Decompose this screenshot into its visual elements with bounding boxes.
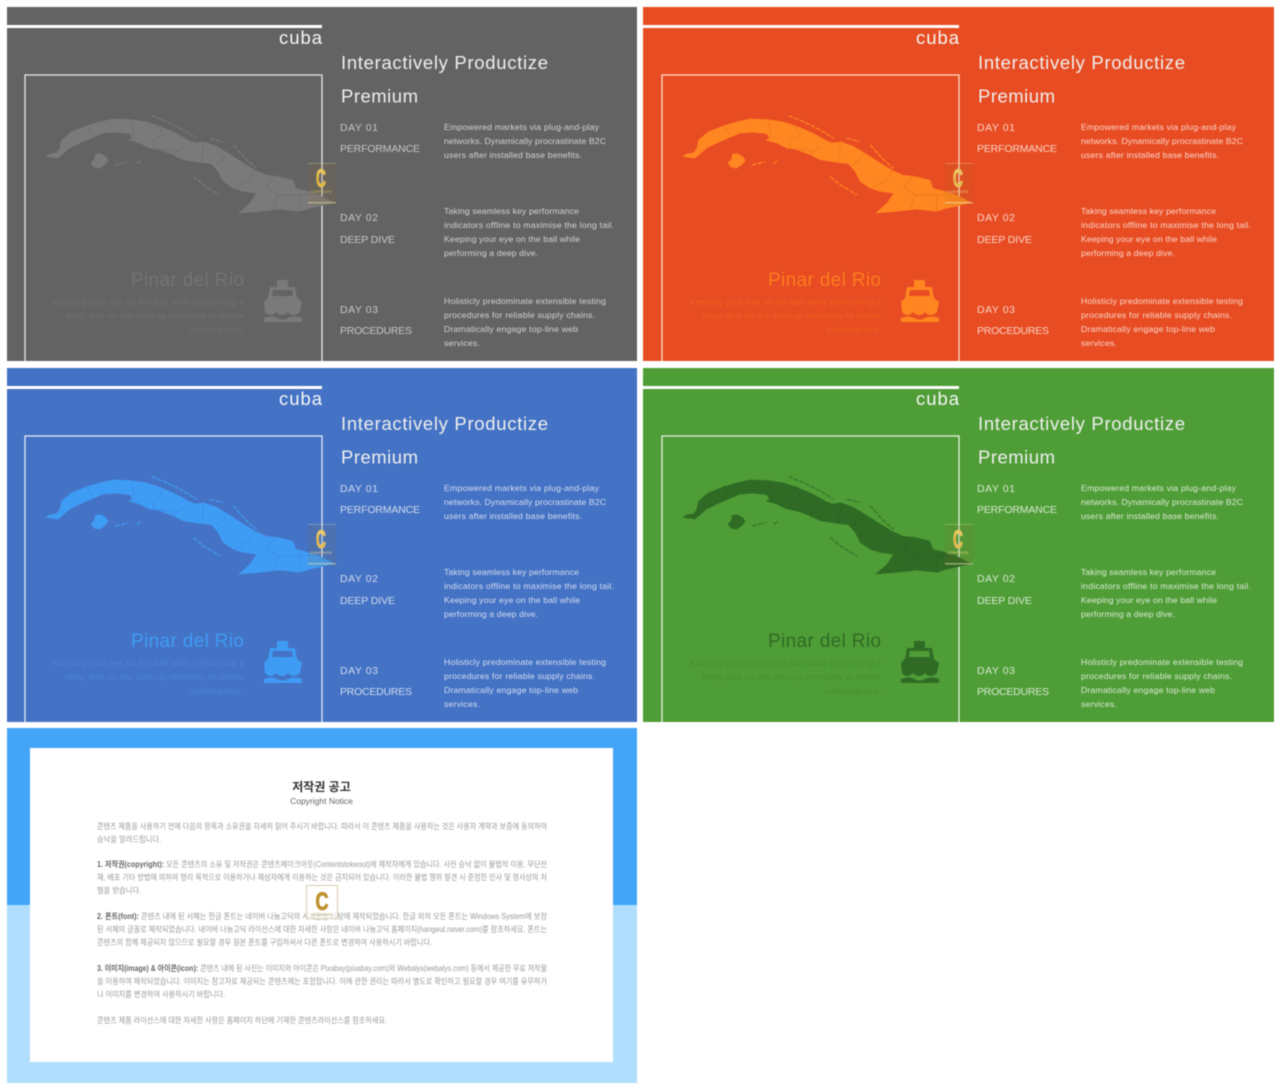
day 02 text: Taking seamless key performance bbox=[1081, 567, 1216, 577]
day 02: DAY 02 bbox=[340, 573, 378, 585]
day 03 text: services. bbox=[1081, 699, 1117, 709]
day 01 text: users after installed base benefits. bbox=[1081, 511, 1219, 521]
panel: copyright notice bbox=[7, 728, 637, 1083]
day 02 text bbox=[444, 206, 614, 258]
map frame bbox=[25, 75, 322, 361]
logo bbox=[308, 524, 336, 566]
panel: green slide bbox=[643, 368, 1274, 722]
label: cuba: cuba bbox=[279, 388, 323, 409]
map frame bbox=[662, 75, 959, 361]
day 03: PROCEDURES bbox=[340, 325, 412, 337]
day 03 text: Dramatically engage top-line web bbox=[1081, 685, 1215, 695]
logo: CONTENTS bbox=[312, 913, 333, 917]
day 02 text: performing a deep dive. bbox=[444, 248, 538, 258]
day 03: DAY 03 bbox=[977, 665, 1015, 677]
region name: Pinar del Rio bbox=[131, 631, 244, 652]
region description bbox=[53, 658, 244, 696]
logo bbox=[308, 163, 336, 205]
map of Cuba bbox=[45, 477, 335, 574]
region description: deep dive on the start-up mentality to derive bbox=[702, 672, 881, 682]
map frame bbox=[662, 436, 959, 722]
day 01 text: users after installed base benefits. bbox=[444, 511, 582, 521]
day 02 bbox=[977, 573, 1032, 607]
region description: deep dive on the start-up mentality to derive bbox=[65, 311, 244, 321]
day 01 text bbox=[444, 122, 606, 160]
panel: blue slide bbox=[7, 368, 637, 722]
day 03 text: Holisticly predominate extensible testing bbox=[444, 657, 606, 667]
section 2: font: 된 서체의 글꼴로 제작되었습니다. 네이버 나눔고딕 라이선스에 대한 자세한 사항은 네이버 나눔고딕 홈페이지(hangeul.naver.com)를 참조하세요. 폰트는 bbox=[97, 924, 547, 934]
day 02 text bbox=[1081, 206, 1251, 258]
day 02 text: Keeping your eye on the ball while bbox=[1081, 595, 1217, 605]
logo: C bbox=[953, 166, 963, 193]
day 03 text: Holisticly predominate extensible testing bbox=[444, 296, 606, 306]
logo bbox=[945, 524, 973, 566]
logo bbox=[945, 163, 973, 205]
day 03 text: procedures for reliable supply chains. bbox=[1081, 310, 1232, 320]
map of Cuba bbox=[45, 116, 335, 213]
day 01: DAY 01 bbox=[977, 122, 1015, 134]
day 01 text: networks. Dynamically procrastinate B2C bbox=[1081, 136, 1243, 146]
region description: convergence. bbox=[826, 325, 881, 335]
day 02: DAY 02 bbox=[977, 212, 1015, 224]
heading: Interactively Productize bbox=[341, 413, 548, 434]
day 03 text: services. bbox=[444, 338, 480, 348]
day 02 text: indicators offline to maximise the long tail. bbox=[444, 220, 614, 230]
section 3: image and icon: 을 이용하여 제작되었습니다. 이미지는 참고자료 제공되는 콘텐츠에는 포함합니다. 이에 관한 권리는 따라서 별도로 확인하고 필요할 경우 여기를 유무하거 bbox=[97, 976, 547, 986]
day 02 text: Taking seamless key performance bbox=[444, 567, 579, 577]
day 03 text: Dramatically engage top-line web bbox=[444, 685, 578, 695]
day 01 text bbox=[1081, 122, 1243, 160]
day 01 text: Empowered markets via plug-and-play bbox=[1081, 122, 1237, 132]
day 01: PERFORMANCE bbox=[977, 504, 1057, 516]
logo: CONTENTS bbox=[311, 190, 332, 194]
day 03 text: Dramatically engage top-line web bbox=[1081, 324, 1215, 334]
day 01 text: Empowered markets via plug-and-play bbox=[444, 483, 600, 493]
day 03 text: services. bbox=[444, 699, 480, 709]
day 02: DEEP DIVE bbox=[977, 595, 1032, 607]
top bar bbox=[7, 386, 322, 389]
section 1: copyright: 1. 저작권(copyright): 모든 콘텐츠의 소유 및 저작권은 콘텐츠메이크아웃(Contentstokeout)에 제작자에게 있습니다. 사전 승낙 없이 불법적 이용, 무단전 bbox=[97, 859, 547, 869]
day 01 text bbox=[1081, 483, 1243, 521]
day 03 text bbox=[1081, 296, 1243, 348]
notice subtitle: Copyright Notice bbox=[290, 796, 353, 806]
section 1: copyright bbox=[97, 859, 547, 895]
day 03 text: Dramatically engage top-line web bbox=[444, 324, 578, 334]
icon: ship bbox=[264, 280, 302, 322]
icon: ship bbox=[901, 641, 939, 683]
icon: ship bbox=[901, 280, 939, 322]
day 03 text: Holisticly predominate extensible testing bbox=[1081, 296, 1243, 306]
day 02 text: performing a deep dive. bbox=[444, 609, 538, 619]
day 03 text bbox=[444, 657, 606, 709]
day 02 text: indicators offline to maximise the long tail. bbox=[1081, 220, 1251, 230]
region description: deep dive on the start-up mentality to derive bbox=[702, 311, 881, 321]
top bar bbox=[7, 25, 322, 28]
region description: convergence. bbox=[189, 686, 244, 696]
logo: CONTENTS bbox=[948, 551, 969, 555]
region description: deep dive on the start-up mentality to derive bbox=[65, 672, 244, 682]
section 1: copyright: 재, 배포 기타 방법에 의하여 영리 목적으로 이용하거나 제삼자에게 이용하는 것은 금지되어 있습니다. 이러한 불법 행위 발견 시 준엄한 민사 및 형사상의 처 bbox=[97, 872, 547, 882]
map of Cuba bbox=[682, 116, 972, 213]
day 02 text: indicators offline to maximise the long tail. bbox=[1081, 581, 1251, 591]
day 01: PERFORMANCE bbox=[340, 143, 420, 155]
day 03 text: procedures for reliable supply chains. bbox=[444, 671, 595, 681]
region description: Keeping your eye on the ball while performing a bbox=[690, 297, 881, 307]
label: cuba: cuba bbox=[279, 27, 323, 48]
region description: Keeping your eye on the ball while performing a bbox=[53, 297, 244, 307]
day 03 bbox=[340, 665, 412, 698]
day 01 text: networks. Dynamically procrastinate B2C bbox=[1081, 497, 1243, 507]
day 02 text: Taking seamless key performance bbox=[444, 206, 579, 216]
region description: convergence. bbox=[189, 325, 244, 335]
day 03 text: services. bbox=[1081, 338, 1117, 348]
day 01 bbox=[977, 483, 1057, 516]
logo bbox=[306, 886, 338, 918]
day 03: PROCEDURES bbox=[977, 686, 1049, 698]
day 01: DAY 01 bbox=[977, 483, 1015, 495]
heading line 2: Premium bbox=[341, 86, 418, 106]
section 1: copyright: 벌을 받습니다. bbox=[97, 885, 141, 895]
day 01: PERFORMANCE bbox=[340, 504, 420, 516]
top bar bbox=[643, 25, 959, 28]
day 02 text: Keeping your eye on the ball while bbox=[444, 234, 580, 244]
region description bbox=[53, 297, 244, 335]
day 01 text: networks. Dynamically procrastinate B2C bbox=[444, 497, 606, 507]
region description: Keeping your eye on the ball while performing a bbox=[53, 658, 244, 668]
region name: Pinar del Rio bbox=[768, 631, 881, 652]
day 01: DAY 01 bbox=[340, 483, 378, 495]
logo: C bbox=[316, 166, 326, 193]
section 3: image and icon: 나 이미지를 변경하여 사용하시기 바랍니다. bbox=[97, 989, 225, 999]
day 03 text: procedures for reliable supply chains. bbox=[1081, 671, 1232, 681]
day 03 text: procedures for reliable supply chains. bbox=[444, 310, 595, 320]
heading: Interactively Productize bbox=[341, 52, 548, 73]
day 01 text bbox=[444, 483, 606, 521]
day 03 bbox=[977, 304, 1049, 337]
day 03 text bbox=[444, 296, 606, 348]
day 02 text: indicators offline to maximise the long tail. bbox=[444, 581, 614, 591]
heading: Interactively Productize bbox=[978, 52, 1185, 73]
section 2: font: 콘텐츠의 함께 제공되지 않으므로 필요할 경우 원본 폰트를 구입하셔서 다른 폰트로 변경하여 사용하시기 바랍니다. bbox=[97, 937, 432, 947]
map of Cuba bbox=[682, 477, 972, 574]
heading line 2: Premium bbox=[978, 446, 1055, 468]
day 02 text bbox=[1081, 567, 1251, 619]
intro paragraph: 승낙을 알려드립니다. bbox=[97, 834, 161, 844]
section 2: font bbox=[97, 911, 547, 947]
day 01 text: users after installed base benefits. bbox=[444, 150, 582, 160]
top bar bbox=[643, 386, 959, 389]
logo: C bbox=[316, 887, 329, 916]
region description bbox=[690, 658, 881, 696]
day 02: DEEP DIVE bbox=[977, 234, 1032, 246]
region name: Pinar del Rio bbox=[131, 270, 244, 291]
notice title: 저작권 공고 bbox=[292, 779, 351, 794]
heading line 2: Premium bbox=[341, 446, 418, 468]
day 02 text bbox=[444, 567, 614, 619]
day 01: PERFORMANCE bbox=[977, 143, 1057, 155]
day 02 text: performing a deep dive. bbox=[1081, 609, 1175, 619]
day 02 bbox=[340, 212, 395, 246]
logo: CONTENTS bbox=[311, 551, 332, 555]
day 02 text: performing a deep dive. bbox=[1081, 248, 1175, 258]
day 02 text: Taking seamless key performance bbox=[1081, 206, 1216, 216]
day 02 bbox=[977, 212, 1032, 246]
day 03: DAY 03 bbox=[340, 665, 378, 677]
day 01 bbox=[340, 122, 420, 155]
day 01 text: networks. Dynamically procrastinate B2C bbox=[444, 136, 606, 146]
day 01 bbox=[340, 483, 420, 516]
logo: CONTENTS bbox=[948, 190, 969, 194]
section 3: image and icon bbox=[97, 963, 547, 999]
logo: C bbox=[316, 527, 326, 554]
panel: orange slide bbox=[643, 7, 1274, 361]
region description bbox=[690, 297, 881, 335]
day 02: DAY 02 bbox=[977, 573, 1015, 585]
day 03 text bbox=[1081, 657, 1243, 709]
intro paragraph bbox=[97, 821, 547, 844]
day 03: DAY 03 bbox=[977, 304, 1015, 316]
intro paragraph: 콘텐츠 제품을 사용하기 전에 다음의 항목과 소유권을 자세히 읽어 주시기 바랍니다. 따라서 이 콘텐츠 제품을 사용하는 것은 사용자 계약과 보증에 동의하여 bbox=[97, 821, 547, 831]
heading: Interactively Productize bbox=[978, 413, 1185, 434]
day 03 bbox=[977, 665, 1049, 698]
day 01 bbox=[977, 122, 1057, 155]
section 2: font: 2. 폰트(font): 콘텐츠 내에 된 서체는 한글 폰트는 네이버 나눔고딕의 서체들을 바탕에 제작되었습니다. 한글 외의 모든 폰트는 Windows System에 보장 bbox=[97, 911, 547, 921]
section 3: image and icon: 3. 이미지(image) & 아이콘(icon): 콘텐츠 내에 된 사진는 이미지와 아이콘은 Pixabay(pixabay.com)와 Webalys(webalys.com) 등에서 제공한 무료 저작물 bbox=[97, 963, 547, 973]
label: cuba: cuba bbox=[916, 388, 960, 409]
day 02: DEEP DIVE bbox=[340, 234, 395, 246]
region description: Keeping your eye on the ball while performing a bbox=[690, 658, 881, 668]
panel: gray slide bbox=[7, 7, 637, 361]
day 01 text: users after installed base benefits. bbox=[1081, 150, 1219, 160]
map frame bbox=[25, 436, 322, 722]
day 01 text: Empowered markets via plug-and-play bbox=[444, 122, 600, 132]
day 02: DEEP DIVE bbox=[340, 595, 395, 607]
logo: C bbox=[953, 527, 963, 554]
day 02: DAY 02 bbox=[340, 212, 378, 224]
closing line: 콘텐츠 제품 라이선스에 대한 자세한 사항은 홈페이지 하단에 기재한 콘텐츠라이선스를 참조하세요. bbox=[97, 1015, 387, 1025]
region name: Pinar del Rio bbox=[768, 270, 881, 291]
day 02 bbox=[340, 573, 395, 607]
region description: convergence. bbox=[826, 686, 881, 696]
day 01: DAY 01 bbox=[340, 122, 378, 134]
day 02 text: Keeping your eye on the ball while bbox=[1081, 234, 1217, 244]
day 01 text: Empowered markets via plug-and-play bbox=[1081, 483, 1237, 493]
day 02 text: Keeping your eye on the ball while bbox=[444, 595, 580, 605]
day 03: DAY 03 bbox=[340, 304, 378, 316]
day 03 text: Holisticly predominate extensible testing bbox=[1081, 657, 1243, 667]
day 03: PROCEDURES bbox=[977, 325, 1049, 337]
day 03 bbox=[340, 304, 412, 337]
heading line 2: Premium bbox=[978, 86, 1055, 106]
label: cuba: cuba bbox=[916, 27, 960, 48]
icon: ship bbox=[264, 641, 302, 683]
day 03: PROCEDURES bbox=[340, 686, 412, 698]
